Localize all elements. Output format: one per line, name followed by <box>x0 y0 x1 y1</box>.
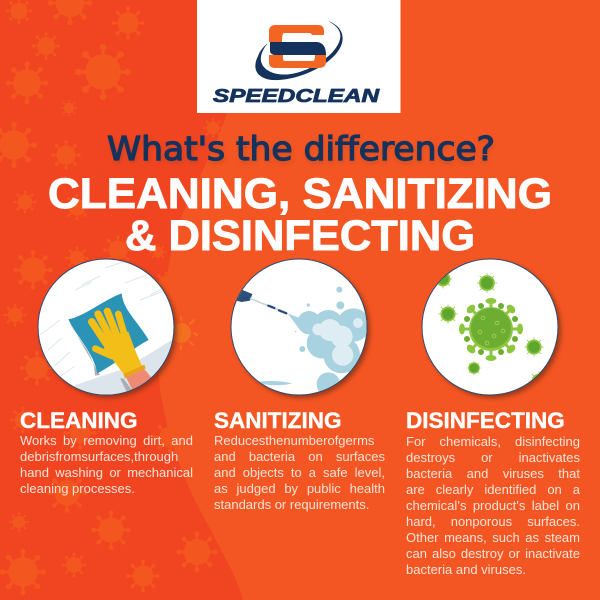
panel: sanitizing <box>214 408 385 512</box>
text block: disinfecting: can also destroy or inactivate <box>406 546 580 561</box>
text block: cleaning: hand washing or mechanical <box>20 465 193 480</box>
panel: disinfecting <box>406 408 580 577</box>
logo wordmark: SPEEDCLEAN <box>213 86 380 106</box>
title: CLEANING, SANITIZING <box>48 171 552 218</box>
text block: disinfecting: bacteria and viruses. <box>406 562 526 577</box>
heading: sanitizing: SANITIZING <box>214 408 342 433</box>
text block: disinfecting: bacteria and viruses that <box>406 466 580 481</box>
text block: sanitizing: as judged by public health <box>214 481 385 496</box>
glove <box>92 311 125 356</box>
large green virus <box>459 298 523 361</box>
logo panel <box>197 0 400 113</box>
heading: disinfecting: DISINFECTING <box>406 408 565 433</box>
text block: cleaning: cleaning processes. <box>20 481 135 496</box>
text block: disinfecting: destroys or inactivates <box>406 450 580 465</box>
cloth <box>68 293 149 373</box>
spray cloud <box>288 314 300 330</box>
heading: What's the difference?: What's the difference? <box>109 132 495 171</box>
background virus pattern <box>0 0 223 595</box>
text block: disinfecting: are clearly identified on a <box>406 482 580 497</box>
background left darker wave <box>0 0 255 600</box>
text block: cleaning <box>20 433 193 496</box>
small green viruses <box>436 272 544 382</box>
text block: disinfecting: For chemicals, disinfecting <box>406 434 580 449</box>
text block: sanitizing: and objects to a safe level, <box>214 465 385 480</box>
text block: sanitizing: and bacteria on surfaces <box>214 449 385 464</box>
arm <box>126 369 151 390</box>
icon: cleaning circle <box>38 258 177 400</box>
text block: disinfecting: hard, nonporous surfaces. <box>406 514 580 529</box>
icon: sanitizing circle <box>231 259 370 398</box>
text block: sanitizing <box>214 433 385 512</box>
title <box>48 171 552 260</box>
text block: cleaning: debrisfromsurfaces,through <box>20 449 178 464</box>
spray nozzle <box>236 290 252 302</box>
logo S mark <box>269 25 326 68</box>
heading: cleaning: CLEANING <box>20 408 138 433</box>
panel: cleaning <box>20 408 193 496</box>
title: & DISINFECTING <box>125 213 475 260</box>
text block: sanitizing: Reducesthenumberofgerms <box>214 433 374 448</box>
text block: sanitizing: standards or requirements. <box>214 497 369 512</box>
text block: disinfecting <box>406 434 580 577</box>
text block: cleaning: Works by removing dirt, and <box>20 433 193 448</box>
logo swoosh <box>255 21 343 80</box>
text block: disinfecting: chemical’s product’s label on <box>406 498 580 513</box>
text block: disinfecting: Other means, such as steam <box>406 530 580 545</box>
heading: What's the difference?: What's the difference? <box>107 129 495 168</box>
icon: disinfecting circle <box>422 259 561 398</box>
